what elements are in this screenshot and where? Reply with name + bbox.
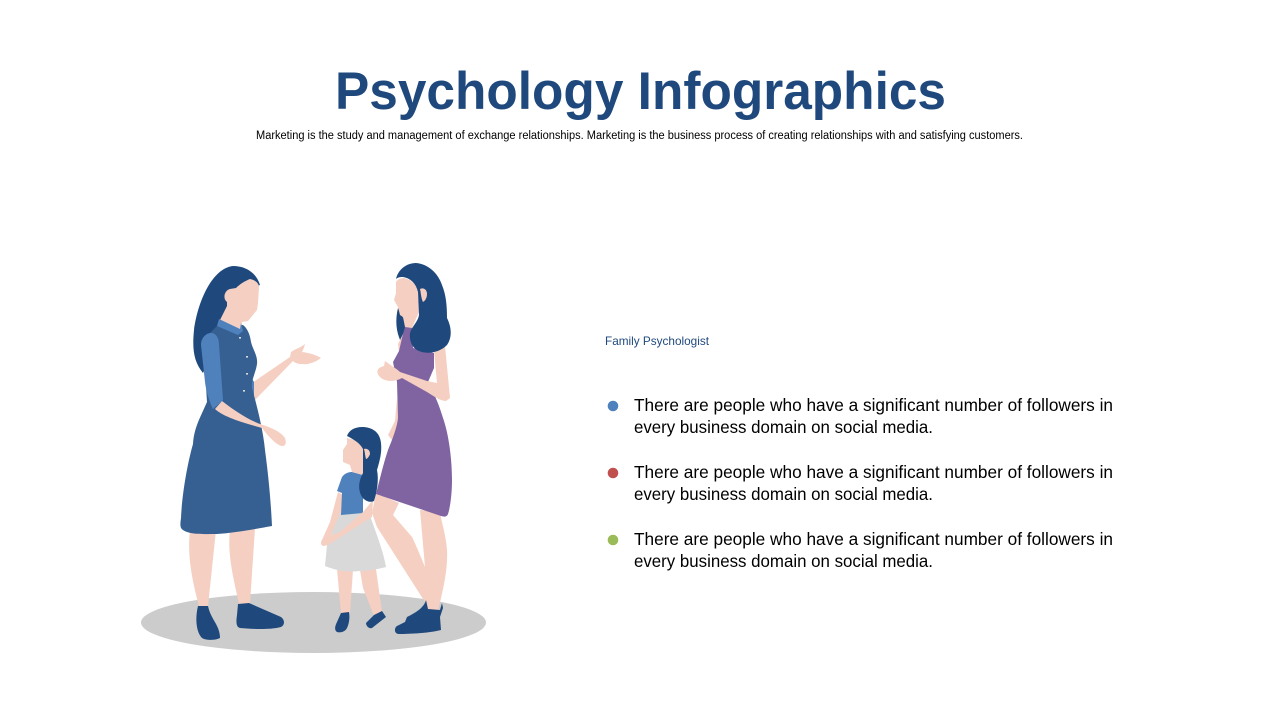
skirt — [325, 513, 386, 571]
ground shadow — [141, 592, 486, 653]
figure: girl — [321, 427, 386, 632]
near arm — [322, 500, 373, 546]
title: Psychology Infographics — [335, 62, 946, 121]
ear — [364, 449, 370, 459]
back skin — [388, 332, 404, 440]
legs — [189, 528, 255, 606]
back hair — [396, 308, 407, 342]
shoes — [196, 603, 284, 640]
dress — [180, 325, 272, 534]
far arm — [321, 492, 343, 546]
bullet item 3 — [608, 529, 1113, 571]
collar — [217, 319, 243, 335]
subtitle text: Marketing is the study and management of exchange relationships. Marketing is the business process of creating relationships with and satisfying customers. — [256, 130, 1023, 142]
bullet list — [608, 395, 1113, 571]
hair — [396, 263, 451, 353]
bullet item 1: There are people who have a significant number of followers in — [634, 395, 1113, 415]
hair — [193, 266, 260, 373]
face and neck — [394, 278, 419, 328]
bullet item 2: There are people who have a significant number of followers in — [634, 462, 1113, 482]
illustration: family with psychologist — [141, 263, 486, 653]
dress — [376, 326, 452, 517]
legs — [372, 493, 447, 611]
face and neck — [220, 279, 259, 331]
bullet item 1 — [608, 395, 1113, 437]
far arm — [252, 344, 321, 401]
figure: left woman — [180, 266, 321, 640]
shirt — [337, 472, 363, 515]
near arm — [215, 401, 286, 446]
ear — [420, 288, 427, 302]
face — [343, 438, 363, 475]
bullet item 1: every business domain on social media. — [634, 417, 933, 437]
shoe — [395, 600, 443, 634]
bullet item 2: every business domain on social media. — [634, 484, 933, 504]
sleeve — [201, 333, 223, 409]
bullet item 3: There are people who have a significant number of followers in — [634, 529, 1113, 549]
arm — [377, 346, 450, 401]
far sleeve — [247, 377, 254, 401]
panel heading: Family Psychologist: Family Psychologist — [605, 334, 710, 348]
hair — [347, 427, 381, 502]
figure: right woman — [372, 263, 452, 634]
buttons — [239, 337, 248, 392]
bullet item 2 — [608, 462, 1113, 504]
shoes — [335, 611, 386, 632]
bullet item 3: every business domain on social media. — [634, 551, 933, 571]
legs — [337, 569, 382, 616]
